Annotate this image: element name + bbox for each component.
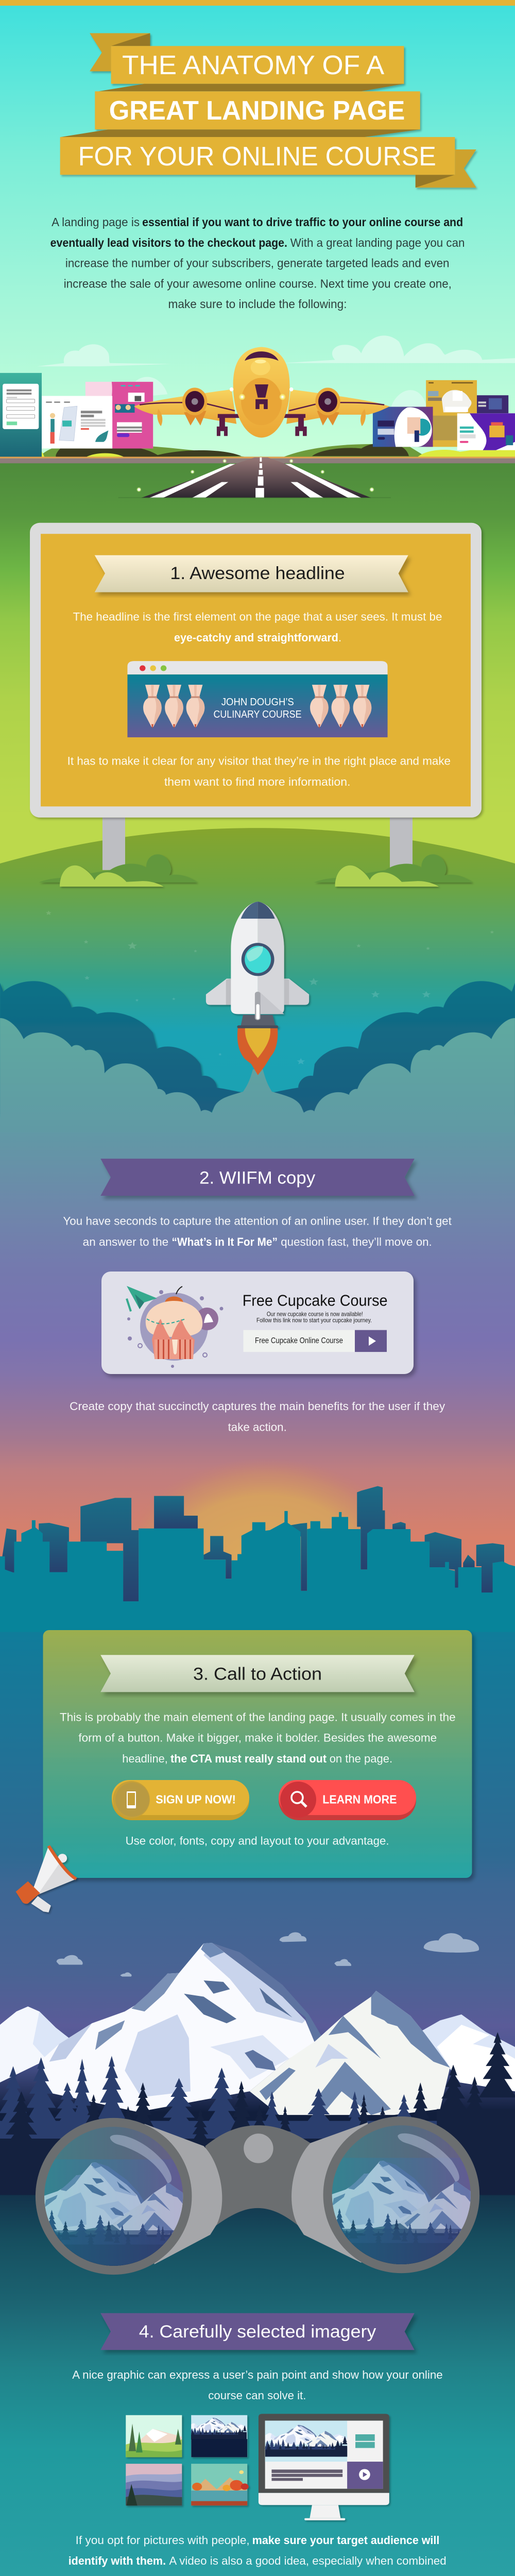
button: sign up now: SIGN UP NOW! [156, 1793, 236, 1806]
landing page thumbnail: white and purple [457, 413, 515, 450]
thumbnail: autumn lake [191, 2464, 249, 2505]
landing page thumbnail: dark purple [477, 395, 508, 413]
landing page thumbnail: teal form [0, 373, 42, 456]
monitor [259, 2414, 389, 2520]
text: headline outro [67, 755, 451, 788]
title ribbon banner [60, 33, 476, 188]
title ribbon banner: FOR YOUR ONLINE COURSE [78, 142, 436, 172]
rocket [206, 902, 309, 1075]
clouds in the sky [57, 1933, 479, 1976]
airplane [134, 347, 389, 437]
text: WIIFM intro: question fast, they’ll move on. [281, 1235, 432, 1248]
thumbnail: snowy mountains [190, 2415, 247, 2458]
ribbon heading 3: 3. Call to Action [193, 1665, 322, 1684]
title ribbon banner: GREAT LANDING PAGE [109, 96, 405, 126]
airport scene [0, 335, 515, 498]
browser window: culinary course [127, 661, 388, 737]
title ribbon banner: THE ANATOMY OF A [122, 50, 385, 80]
text: WIIFM outro [70, 1400, 445, 1433]
text: WIIFM intro: You have seconds to capture the attention of an online user. If they don’t get [63, 1215, 452, 1227]
text: headline outro: It has to make it clear for any visitor that they’re in the right place and make [67, 755, 451, 768]
text: CTA intro: on the page. [330, 1752, 392, 1765]
text: imagery outro [68, 2534, 447, 2576]
button: learn more: LEARN MORE [322, 1793, 397, 1806]
card: cupcake course landing page: Free Cupcake Online Course [255, 1336, 343, 1345]
binoculars [1, 2116, 515, 2275]
city skyline with sun [0, 1458, 515, 1675]
intro text: increase the sale of your awesome online course. Next time you create one, [64, 277, 452, 291]
landing page thumbnail: phone [42, 396, 112, 449]
faint stars [46, 910, 494, 1064]
ribbon heading 1: 1. Awesome headline [170, 564, 345, 583]
text: WIIFM outro: take action. [228, 1420, 287, 1433]
ribbon heading 4 [100, 2313, 415, 2350]
card: cupcake course landing page: Our new cupcake course is now available! [267, 1311, 363, 1318]
text: headline intro [73, 611, 442, 644]
button: learn more [279, 1780, 416, 1820]
billboard panel: step 1 [30, 523, 482, 887]
ribbon heading 1 [95, 555, 408, 592]
ribbon heading 3 [100, 1655, 415, 1692]
intro text: eventually lead visitors to the checkout page. [50, 236, 287, 249]
landing page thumbnail: gold [426, 380, 477, 447]
smoke clouds [0, 910, 515, 1132]
card: cupcake course landing page: Follow this link now to start your cupcake journey. [256, 1316, 372, 1324]
text: WIIFM intro: an answer to the [83, 1235, 168, 1248]
clouds [37, 335, 515, 408]
text: imagery outro: A video is also a good idea, especially when combined [169, 2554, 447, 2567]
text: headline intro: . [338, 631, 341, 644]
thumbnail: misty ridges [126, 2464, 182, 2505]
text: headline intro: eye-catchy and straightforward [174, 631, 338, 644]
text: CTA intro: the CTA must really stand out [170, 1752, 327, 1765]
text: imagery outro: make sure your target audience will [252, 2534, 439, 2547]
intro text [50, 215, 465, 311]
text: WIIFM intro: “What’s in It For Me” [172, 1235, 278, 1248]
text: imagery intro: course can solve it. [208, 2389, 306, 2402]
card: cupcake course landing page [101, 1272, 414, 1374]
hill [0, 828, 515, 927]
browser window: culinary course: CULINARY COURSE [213, 709, 302, 720]
mountains [0, 1933, 515, 2195]
intro text: A landing page is [52, 215, 140, 229]
runway [118, 457, 391, 498]
image thumbnails and monitor [126, 2414, 389, 2520]
landing page thumbnail: pink [85, 382, 153, 449]
intro text: make sure to include the following: [168, 297, 347, 311]
intro text: increase the number of your subscribers, generate targeted leads and even [65, 257, 449, 270]
top gold bar [0, 0, 515, 6]
browser window: culinary course: JOHN DOUGH’S [221, 697, 294, 708]
landing page thumbnail: blue [373, 407, 433, 447]
text: imagery intro [72, 2368, 443, 2402]
ribbon heading 2 [100, 1159, 415, 1196]
text: CTA intro: headline, [122, 1752, 168, 1765]
text: CTA outro: Use color, fonts, copy and layout to your advantage. [126, 1834, 389, 1847]
text: CTA intro: form of a button. Make it bigger, make it bolder. Besides the awesome [78, 1732, 437, 1744]
text: imagery outro: identify with them. [68, 2554, 166, 2567]
text: CTA intro: This is probably the main element of the landing page. It usually comes in the [60, 1710, 456, 1723]
text: headline intro: The headline is the first element on the page that a user sees. It must be [73, 611, 442, 623]
card: cupcake course landing page: Free Cupcake Course [243, 1292, 388, 1310]
button: sign up now [112, 1780, 249, 1820]
icon: cupcake illustration [126, 1286, 224, 1368]
road band [0, 456, 515, 459]
intro text: essential if you want to drive traffic to your online course and [142, 215, 463, 229]
text: headline outro: them want to find more information. [164, 775, 350, 788]
ribbon heading 4: 4. Carefully selected imagery [139, 2322, 376, 2342]
text: CTA intro [60, 1710, 456, 1765]
ribbon heading 2: 2. WIIFM copy [199, 1168, 315, 1188]
icon: megaphone [16, 1846, 76, 1912]
hedges [0, 438, 515, 457]
text: imagery outro: If you opt for pictures with people, [76, 2534, 250, 2547]
text: WIIFM intro [63, 1215, 452, 1248]
panel: call to action [43, 1630, 472, 1878]
intro text: With a great landing page you can [290, 236, 465, 249]
text: imagery intro: A nice graphic can express a user’s pain point and show how your online [72, 2368, 443, 2381]
thumbnail: green valley [126, 2415, 182, 2457]
text: WIIFM outro: Create copy that succinctly captures the main benefits for the user if they [70, 1400, 445, 1413]
